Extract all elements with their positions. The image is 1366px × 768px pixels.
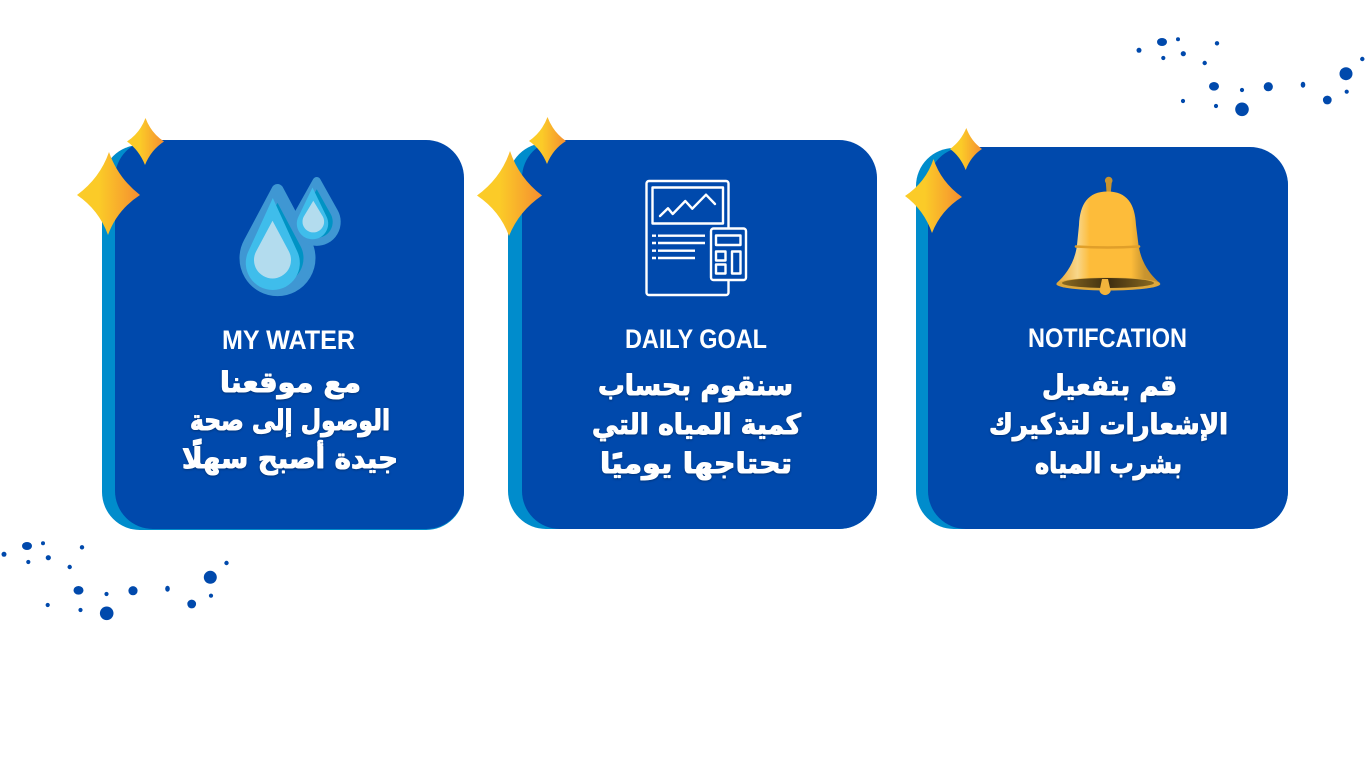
- panel 1 face: [115, 140, 464, 529]
- text block: daily goal description: تحتاجها يوميًا: [600, 447, 792, 480]
- heading: my water: MY WATER: [222, 325, 355, 355]
- text block: daily goal description: سنقوم بحساب: [598, 369, 793, 402]
- icon: report and calculator: [646, 181, 746, 295]
- icon: sparkles panel 2: [477, 117, 566, 236]
- decorative dots: bottom left: [2, 541, 229, 620]
- panel 3 backing: [916, 148, 1288, 529]
- text block: notification description: [989, 369, 1228, 480]
- text block: daily goal description: [592, 369, 802, 480]
- text block: my water description: مع موقعنا: [220, 366, 361, 399]
- text block: notification description: الإشعارات لتذكيرك: [989, 408, 1228, 441]
- icon: sparkles panel 1: [77, 118, 164, 235]
- panel 1 backing: [102, 145, 464, 530]
- text block: notification description: قم بتفعيل: [1042, 369, 1177, 402]
- panel 2 face: [522, 140, 877, 529]
- text block: notification description: بشرب المياه: [1035, 447, 1182, 480]
- panel: notification: [916, 147, 1288, 529]
- icon: bell: [1056, 177, 1160, 295]
- text block: my water description: جيدة أصبح سهلًا: [182, 438, 398, 475]
- panel: daily goal: [508, 140, 877, 529]
- decorative dots: top right: [1136, 37, 1365, 116]
- heading: daily goal: DAILY GOAL: [625, 324, 767, 354]
- panel 3 face: [928, 147, 1288, 529]
- panel: my water: [102, 140, 464, 530]
- heading: notification: NOTIFCATION: [1028, 323, 1187, 353]
- icon: sparkles panel 3: [905, 128, 982, 233]
- icon: water drops: [246, 181, 337, 290]
- text block: my water description: [182, 366, 398, 475]
- text block: my water description: الوصول إلى صحة: [190, 404, 390, 438]
- panel 2 backing: [508, 143, 877, 529]
- text block: daily goal description: كمية المياه التي: [592, 408, 802, 441]
